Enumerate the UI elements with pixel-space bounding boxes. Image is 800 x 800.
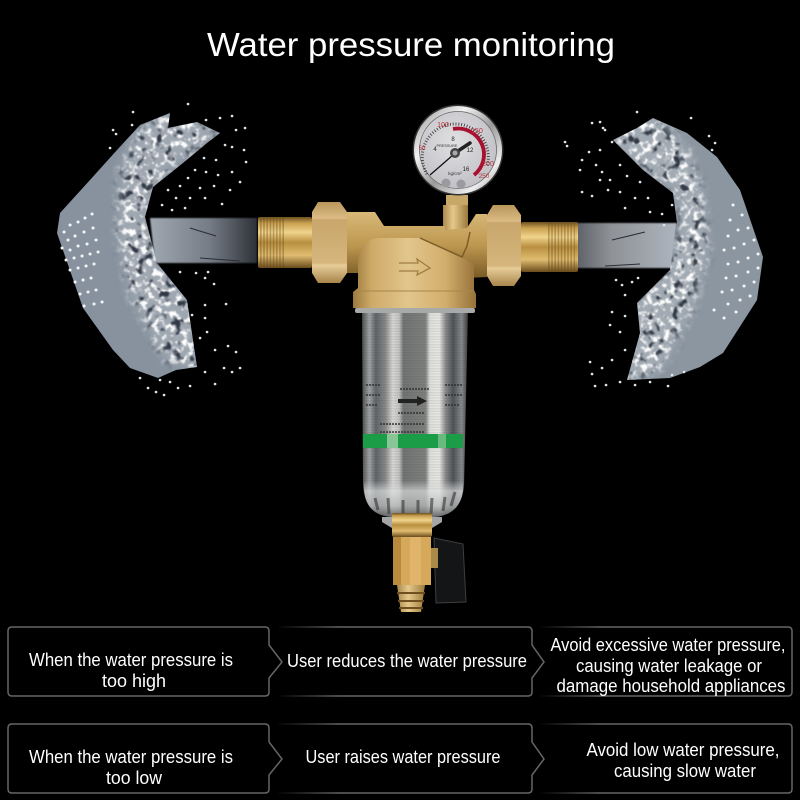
left union nut [312,202,347,283]
gauge tick scale [422,124,488,174]
gauge numbers: 100 [437,122,449,129]
gauge needle [430,143,470,175]
box: user raises pressure [278,724,544,793]
box: user reduces pressure: User reduces the water pressure [287,651,527,671]
gauge numbers [419,122,494,180]
main brass cap [353,232,476,308]
right threaded pipe [521,222,578,272]
box: avoid excessive pressure: damage household appliances [556,676,786,696]
gauge numbers: PRESSURE [437,144,458,148]
title: Water pressure monitoring [207,26,615,63]
drain valve hex [393,537,431,585]
pressure gauge stem [443,195,468,235]
box: when pressure too low: When the water pressure is [29,747,233,767]
clear filter bowl [355,308,475,517]
pressure gauge [412,104,504,196]
box: avoid low pressure [540,724,792,793]
bowl neck [382,513,442,537]
box: when pressure too high [8,627,282,696]
box: user raises pressure: User raises water pressure [306,747,500,767]
gauge numbers: 12 [467,148,474,154]
box: avoid low pressure: Avoid low water pressure, [586,740,780,760]
gauge numbers: 50 [419,146,426,152]
row 2: water pressure too low [8,724,792,793]
box: avoid low pressure: causing slow water [614,761,756,781]
hose barb [397,585,425,612]
upper body tube [347,212,487,278]
drain valve handle [430,538,466,603]
row 1: water pressure too high [8,627,792,696]
gauge logos [442,178,466,188]
filter valve assembly [258,195,578,612]
gauge numbers: 8 [451,137,455,143]
right water splash [565,105,770,390]
box: avoid excessive pressure: causing water leakage or [576,656,762,676]
box: when pressure too low [8,724,282,793]
right union nut [487,205,521,286]
box: when pressure too low: too low [106,768,163,788]
gauge numbers: 250 [479,173,490,180]
gauge numbers: 150 [471,128,483,135]
left threaded pipe [258,217,312,268]
box: when pressure too high: When the water pressure is [29,650,233,670]
box: avoid excessive pressure [540,627,792,696]
red danger arc [453,129,484,175]
gauge numbers: 200 [482,161,494,168]
gauge numbers: 4 [433,147,437,153]
gauge numbers: 16 [463,167,470,173]
label arrow on mesh [398,396,427,406]
box: user reduces pressure [278,627,544,696]
flow arrow embossed on cap [399,259,430,275]
gauge numbers: kg/cm² [448,171,462,176]
left water splash [50,100,257,395]
green band [363,434,463,448]
box: when pressure too high: too high [102,671,166,691]
